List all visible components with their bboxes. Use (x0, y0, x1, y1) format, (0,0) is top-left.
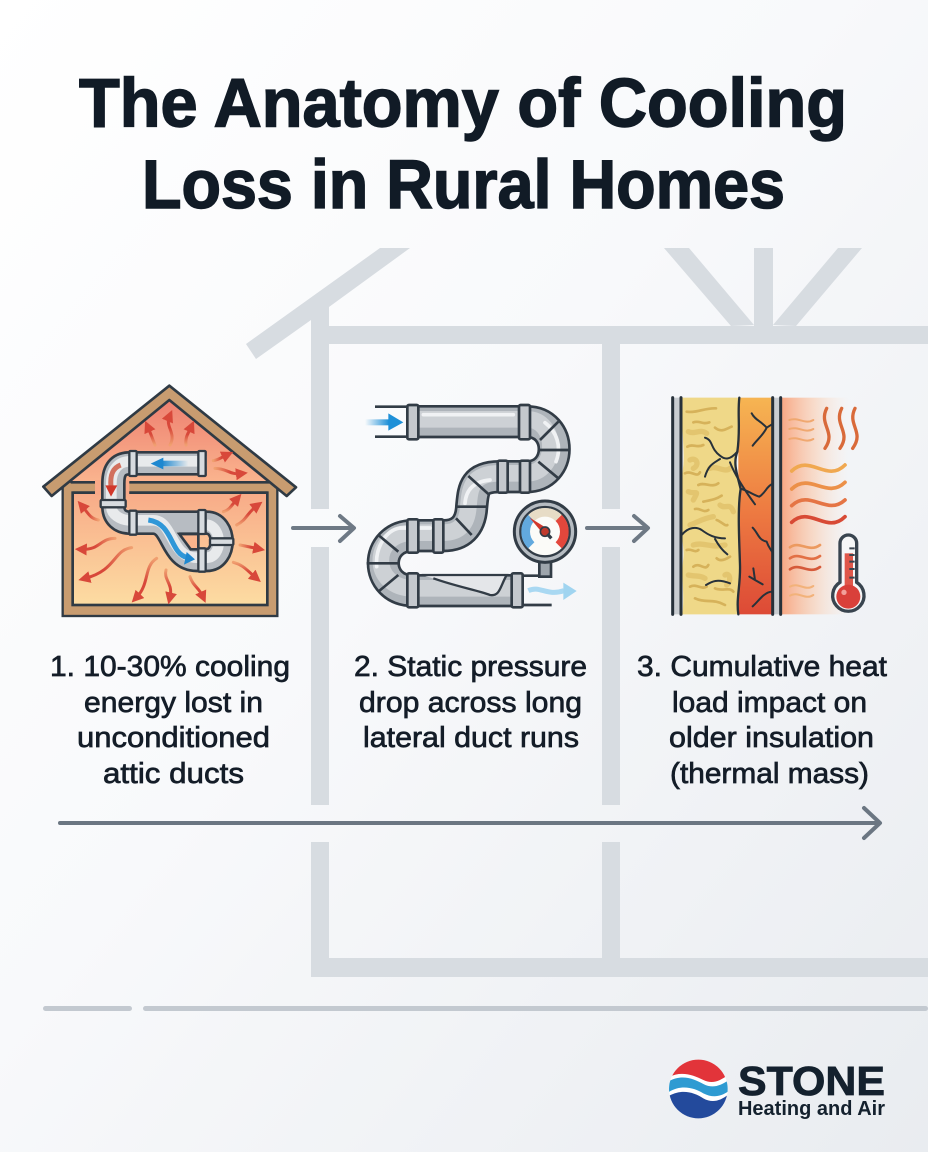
house framing backdrop (246, 248, 928, 977)
caption: step 3: 3. Cumulative heat (637, 651, 887, 683)
logo mark (669, 1060, 728, 1118)
caption: step 2: lateral duct runs (363, 722, 579, 754)
arrow: overall progression (60, 808, 880, 838)
insulation texture (685, 408, 733, 605)
title: Loss in Rural Homes (142, 146, 785, 223)
caption: step 3: load impact on (672, 687, 867, 719)
pressure gauge (514, 501, 576, 577)
duct run (101, 451, 233, 572)
caption: step 1: 1. 10-30% cooling (50, 651, 290, 683)
thermometer (833, 535, 864, 611)
heat waves (789, 408, 857, 597)
caption: step 2: drop across long (359, 687, 582, 719)
caption: step 1 (50, 651, 290, 790)
arrow: step 2 to step 3 (587, 516, 648, 541)
house walls (63, 400, 277, 616)
roof (43, 386, 296, 496)
icon: cracked insulation wall with heat (673, 398, 864, 614)
logo: Stone Heating and Air (667, 1057, 885, 1120)
caption: step 1: energy lost in (84, 687, 263, 719)
footer divider (43, 1006, 928, 1011)
arrow: step 1 to step 2 (293, 516, 354, 541)
icon: house with leaking attic ducts (43, 386, 296, 616)
caption: step 3: (thermal mass) (670, 758, 869, 790)
caption: step 1: unconditioned (77, 722, 270, 754)
caption: step 1: attic ducts (103, 758, 244, 790)
wall layers (673, 398, 781, 614)
icon: long duct run with pressure gauge (365, 405, 577, 607)
caption: step 2 (354, 651, 587, 754)
winding duct (367, 405, 570, 607)
caption: step 3 (637, 651, 887, 790)
title (79, 64, 847, 223)
wall lines and cracks (673, 398, 781, 614)
outlet air arrow (528, 583, 577, 600)
caption: step 2: 2. Static pressure (354, 651, 587, 683)
caption: step 3: older insulation (669, 722, 874, 754)
logo wordmark: STONE (738, 1058, 885, 1104)
cool air arrows in duct (105, 458, 195, 565)
escaping heat arrows (82, 417, 258, 597)
title: The Anatomy of Cooling (79, 64, 847, 142)
inlet air arrow (365, 407, 408, 437)
logo wordmark: Heating and Air (738, 1098, 885, 1120)
radiant heat glow (782, 398, 848, 614)
